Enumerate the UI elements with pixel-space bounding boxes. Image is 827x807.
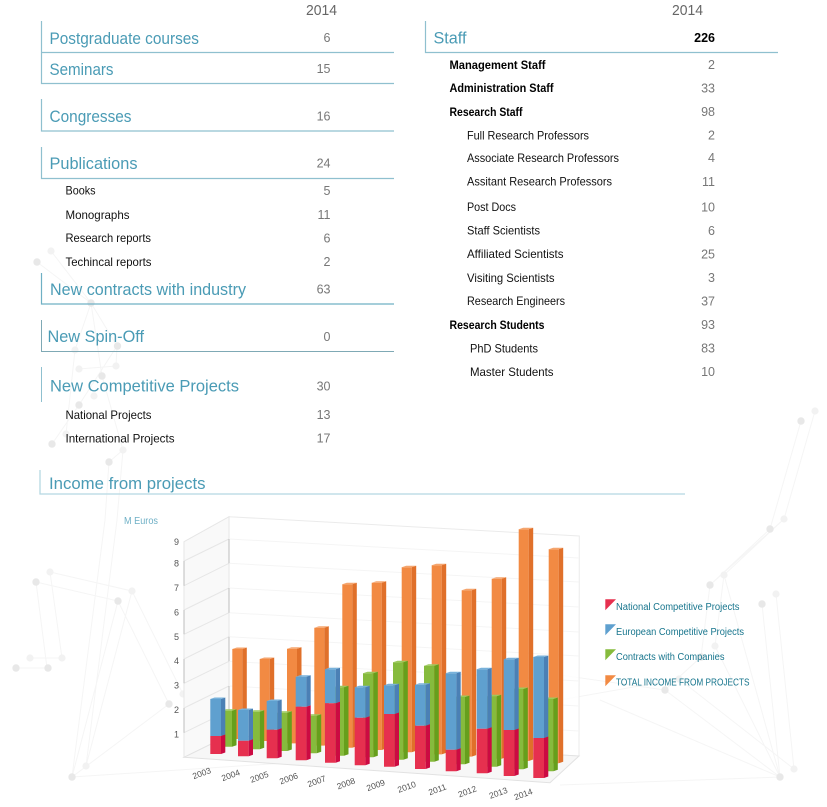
x axis year labels: 2008 bbox=[335, 775, 357, 791]
row: Postgraduate courses: Postgraduate courses bbox=[50, 29, 199, 48]
column year heading right: 2014 bbox=[672, 2, 703, 19]
legend item: european: European Competitive Projects bbox=[616, 627, 744, 638]
row: Congresses: Congresses bbox=[50, 107, 132, 126]
sub-rows: publications breakdown: 2 bbox=[324, 255, 331, 269]
y axis labels: 3 bbox=[174, 681, 179, 691]
row: Staff total bbox=[426, 21, 778, 52]
heading: Income from projects bbox=[40, 470, 685, 494]
legend item: national: National Competitive Projects bbox=[616, 602, 740, 613]
row: Staff total: 226 bbox=[694, 31, 715, 45]
row: New Competitive Projects bbox=[42, 367, 331, 402]
staff rows: 93 bbox=[701, 318, 715, 332]
row: New Spin-Off bbox=[42, 320, 394, 352]
staff rows: 6 bbox=[708, 224, 715, 238]
x axis year labels: 2009 bbox=[365, 777, 387, 793]
staff rows: 11 bbox=[702, 175, 715, 189]
row: Staff total: Staff bbox=[434, 28, 467, 48]
staff rows: Assitant Research Professors bbox=[467, 174, 612, 188]
x axis year labels: 2003 bbox=[191, 765, 213, 781]
staff rows: Staff Scientists bbox=[467, 224, 540, 238]
sub-rows: publications breakdown: 6 bbox=[324, 232, 331, 246]
row: New Spin-Off: 0 bbox=[324, 330, 331, 344]
y axis labels: 9 bbox=[174, 537, 179, 547]
staff rows: Post Docs bbox=[467, 200, 516, 214]
y axis labels: 6 bbox=[174, 608, 179, 618]
series: contracts with companies bbox=[222, 661, 558, 771]
staff rows: Master Students bbox=[470, 365, 554, 379]
chart walls and floor bbox=[184, 517, 579, 783]
row: New contracts with industry: New contracts with industry bbox=[50, 280, 246, 299]
staff rows: Research Engineers bbox=[467, 294, 565, 308]
sub-rows: publications breakdown: Research reports bbox=[66, 231, 151, 245]
y axis labels: 7 bbox=[174, 583, 179, 593]
row: Congresses bbox=[50, 107, 331, 126]
staff rows: 10 bbox=[701, 365, 715, 379]
staff rows: 2 bbox=[708, 58, 715, 72]
panel: staff table bbox=[426, 2, 778, 379]
y axis labels: 4 bbox=[174, 656, 179, 666]
row: Publications bbox=[50, 154, 331, 173]
row: New Competitive Projects: 30 bbox=[317, 380, 331, 394]
x axis year labels: 2012 bbox=[457, 783, 478, 799]
row: Seminars: Seminars bbox=[50, 60, 114, 79]
row: Postgraduate courses bbox=[50, 29, 331, 48]
row: Publications: Publications bbox=[50, 154, 138, 173]
staff rows: 2 bbox=[708, 128, 715, 142]
row: Postgraduate courses: 6 bbox=[324, 31, 331, 45]
legend bbox=[605, 599, 750, 688]
legend item: contracts: Contracts with Companies bbox=[616, 652, 724, 663]
y axis labels: 8 bbox=[174, 559, 179, 569]
legend item: total bbox=[605, 675, 750, 688]
staff rows: 33 bbox=[701, 82, 715, 96]
sub-rows: publications breakdown: 5 bbox=[324, 184, 331, 198]
sub-rows: projects breakdown: 13 bbox=[317, 408, 331, 422]
legend item: total: TOTAL INCOME FROM PROJECTS bbox=[616, 678, 750, 688]
chart: income from projects 3D bars bbox=[124, 516, 579, 802]
x axis year labels: 2007 bbox=[306, 773, 328, 789]
sub-rows: projects breakdown bbox=[66, 408, 331, 446]
sub-rows: publications breakdown: Books bbox=[66, 184, 96, 198]
x axis year labels bbox=[191, 765, 534, 802]
column year heading left: 2014 bbox=[306, 2, 337, 19]
staff rows: Visiting Scientists bbox=[467, 271, 554, 285]
legend item: contracts bbox=[605, 649, 724, 663]
staff rows: Administration Staff bbox=[450, 81, 554, 95]
staff rows: PhD Students bbox=[470, 342, 538, 356]
sub-rows: publications breakdown: Techincal reports bbox=[66, 255, 152, 269]
staff rows: 98 bbox=[701, 105, 715, 119]
axis unit label: M Euros bbox=[124, 516, 158, 527]
x axis year labels: 2014 bbox=[513, 786, 534, 802]
row: New Competitive Projects: New Competitive Projects bbox=[50, 376, 239, 396]
staff rows: 83 bbox=[701, 342, 715, 356]
sub-rows: publications breakdown: Monographs bbox=[66, 208, 130, 222]
sub-rows: projects breakdown: 17 bbox=[317, 432, 331, 446]
staff rows: 4 bbox=[708, 151, 715, 165]
sub-rows: publications breakdown: 11 bbox=[318, 208, 331, 222]
staff rows: 3 bbox=[708, 271, 715, 285]
staff rows: 10 bbox=[701, 200, 715, 214]
row: Seminars bbox=[50, 60, 331, 79]
row: Congresses: 16 bbox=[317, 110, 331, 124]
row: New contracts with industry: 63 bbox=[317, 282, 331, 296]
series: european competitive projects bbox=[210, 656, 548, 750]
y axis labels: 5 bbox=[174, 632, 179, 642]
background network pattern bbox=[12, 247, 819, 785]
heading: Income from projects: Income from projects bbox=[49, 474, 206, 493]
x axis year labels: 2010 bbox=[396, 779, 418, 795]
row: Publications: 24 bbox=[317, 156, 331, 170]
sub-rows: projects breakdown: International Projects bbox=[66, 432, 174, 446]
y axis labels bbox=[174, 537, 179, 740]
panel: activities table bbox=[42, 2, 394, 446]
staff rows: Full Research Professors bbox=[467, 128, 589, 142]
x axis year labels: 2006 bbox=[278, 770, 300, 786]
row: New contracts with industry bbox=[42, 273, 394, 304]
staff rows: Research Staff bbox=[450, 105, 523, 119]
staff rows: Associate Research Professors bbox=[467, 151, 619, 165]
series: national competitive projects bbox=[210, 702, 548, 778]
staff rows: Affiliated Scientists bbox=[467, 247, 564, 261]
staff rows: Research Students bbox=[450, 318, 545, 332]
x axis year labels: 2013 bbox=[488, 785, 509, 801]
sub-rows: publications breakdown bbox=[66, 184, 331, 269]
section rules left bbox=[42, 21, 394, 178]
row: New Spin-Off: New Spin-Off bbox=[48, 327, 144, 346]
staff rows: 37 bbox=[701, 294, 715, 308]
sub-rows: projects breakdown: National Projects bbox=[66, 408, 152, 422]
series: total income from projects bbox=[232, 528, 563, 763]
y axis labels: 1 bbox=[174, 730, 179, 740]
staff rows: 25 bbox=[701, 248, 715, 262]
row: Seminars: 15 bbox=[317, 62, 331, 76]
y axis labels: 2 bbox=[174, 705, 179, 715]
x axis year labels: 2011 bbox=[427, 782, 448, 797]
x axis year labels: 2004 bbox=[220, 767, 242, 783]
staff rows: Management Staff bbox=[450, 58, 546, 72]
staff rows bbox=[450, 58, 715, 379]
x axis year labels: 2005 bbox=[249, 769, 270, 785]
